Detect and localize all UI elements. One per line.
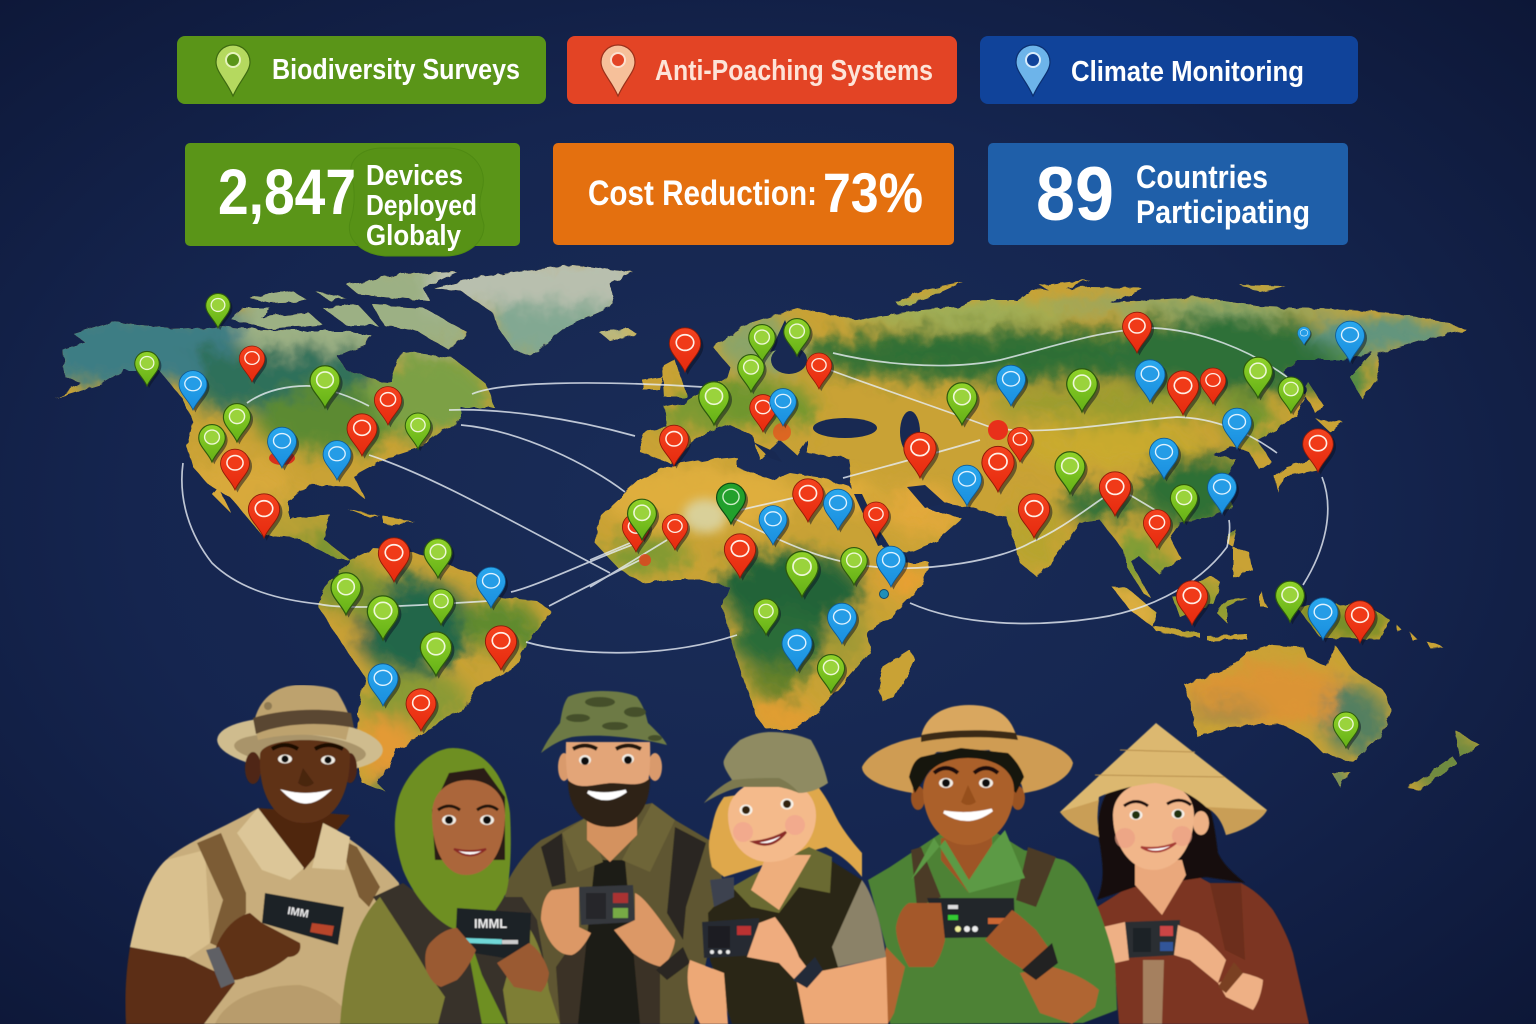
stat: 2,847 devices deployed globally: Globaly (366, 220, 461, 252)
device: camouflage man's handheld (579, 885, 635, 925)
legend badge: Climate Monitoring: Climate Monitoring (1071, 56, 1304, 88)
person 1: ranger in safari hat (125, 685, 400, 1024)
wrist bracelet (1218, 962, 1243, 993)
small map spots (269, 420, 1008, 598)
stat: cost reduction 73%: 73% (823, 161, 923, 224)
hands holding device (541, 887, 690, 980)
hand holding device (216, 913, 300, 980)
continents (55, 264, 1480, 792)
person 5: man with wide straw hat (862, 705, 1117, 1024)
legend badge: Anti-Poaching Systems (567, 36, 957, 104)
map markers: biodiversity surveys (green) (135, 293, 1361, 750)
team of field workers (125, 685, 1309, 1024)
hands holding device (876, 903, 1099, 1024)
stat: 2,847 devices deployed globally: Devices (366, 160, 463, 192)
legend badge: Anti-Poaching Systems: Anti-Poaching Systems (655, 55, 933, 87)
stat: cost reduction 73%: Cost Reduction: (588, 174, 817, 213)
stat: 2,847 devices deployed globally: Deployed (366, 190, 477, 222)
wristwatch (1022, 943, 1058, 980)
stat: 89 countries participating: Participating (1136, 194, 1310, 230)
stat: 2,847 devices deployed globally: 2,847 (218, 156, 356, 228)
stat: cost reduction 73% (553, 143, 954, 245)
legend badge: Biodiversity Surveys: Biodiversity Surveys (272, 54, 520, 86)
pale glow over West Africa (683, 499, 727, 533)
person 2: woman in green hijab (340, 748, 560, 1024)
stat: 89 countries participating: Countries (1136, 159, 1268, 195)
wrist band (206, 947, 235, 988)
stat: 2,847 devices deployed globally (185, 143, 520, 256)
stat: 89 countries participating: 89 (1036, 152, 1114, 237)
network connection lines (182, 328, 1328, 653)
hands holding device (1103, 922, 1263, 1010)
hands holding device (425, 928, 549, 992)
device: IMM handheld (262, 893, 344, 945)
device: IMML handheld (455, 908, 531, 962)
world map (55, 264, 1480, 792)
person 6: woman in conical hat (1060, 723, 1309, 1024)
legend badge: Climate Monitoring (980, 36, 1358, 104)
map markers: climate monitoring (blue) (179, 321, 1367, 709)
device: IMM handheld: IMM (286, 905, 310, 921)
legend badge: Biodiversity Surveys (177, 36, 546, 104)
hands holding device (747, 917, 811, 980)
stat: 89 countries participating (988, 143, 1348, 245)
map markers: anti-poaching systems (red) (221, 312, 1378, 734)
wristwatch (793, 957, 823, 988)
person 3: man with camo hat and beard (505, 691, 722, 1024)
inland seas (753, 320, 945, 546)
overlapping pins: front markers (628, 389, 799, 543)
device: conical hat woman's handheld (1125, 920, 1180, 958)
device: IMML handheld: IMML (474, 916, 507, 931)
device: khaki cap woman's handheld (702, 918, 761, 958)
device: straw hat man's handheld (927, 898, 1015, 938)
person 4: woman in khaki cap (688, 732, 888, 1024)
